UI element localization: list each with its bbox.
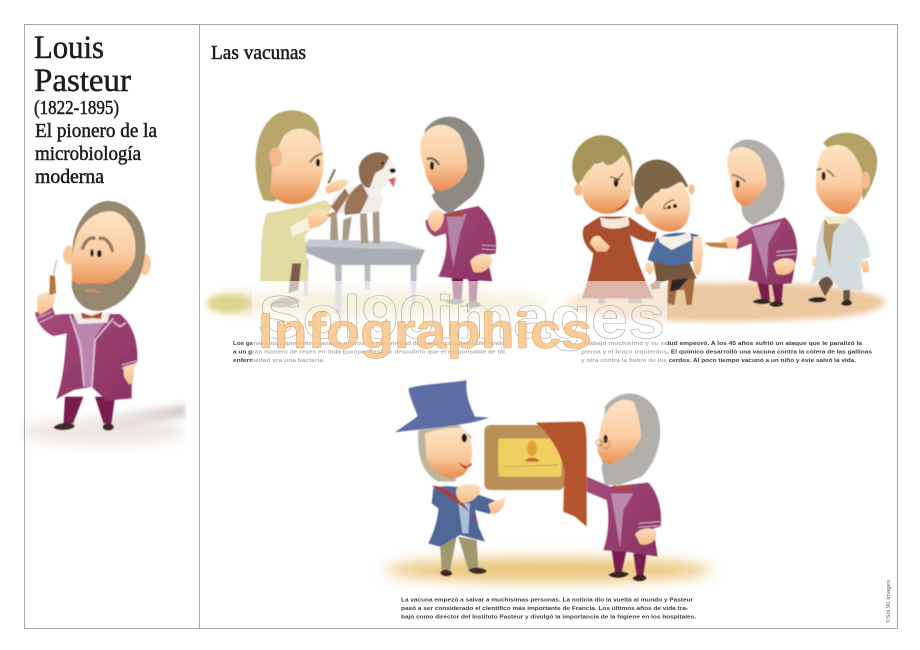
floor shadow xyxy=(20,404,187,445)
text: scene 1 caption xyxy=(233,341,505,364)
legs and shoes xyxy=(53,397,115,431)
table xyxy=(303,239,425,313)
hand with vaccine tool xyxy=(37,260,57,315)
moustache and beard front xyxy=(73,262,135,310)
text: scene 2 caption: Trabajó muchísimo y su salud empeoró. A los 45 años sufrió un ataque que le paralizó la xyxy=(583,341,863,347)
right hand xyxy=(123,363,135,385)
red curtain xyxy=(536,422,587,527)
young assistant xyxy=(808,133,877,306)
watermark panel xyxy=(252,281,667,366)
waistcoat xyxy=(73,318,108,387)
dignitary in top hat xyxy=(395,380,505,576)
heading: Louis Pasteur: Louis xyxy=(34,30,104,66)
coat xyxy=(35,305,137,401)
text: scene 3 caption: bajó como director del Instituto Pasteur y divulgó la importancia de la higiene en los hospitales. xyxy=(401,614,696,620)
heading: Louis Pasteur: El pionero de la xyxy=(35,120,157,142)
heading: Louis Pasteur: Pasteur xyxy=(34,63,131,99)
heading: Louis Pasteur xyxy=(34,30,157,188)
text: scene 2 caption: y otra contra la fiebre de los cerdos. Al poco tiempo vacunó a un niño y éste salvó la vida. xyxy=(581,358,856,364)
young doctor xyxy=(256,110,348,307)
heading: Louis Pasteur: (1822-1895) xyxy=(34,97,119,119)
Pasteur with syringe xyxy=(704,139,797,307)
mother xyxy=(572,135,657,303)
text: scene 3 caption xyxy=(401,598,696,620)
face xyxy=(72,211,135,288)
illustration: scene 2, vaccinating the boy xyxy=(566,133,884,322)
heading: Las vacunas: Las vacunas xyxy=(211,42,306,64)
text: scene 2 caption: pierna y el brazo izquierdos. El químico desarrolló una vacuna contra la cólera de las gallinas xyxy=(581,350,872,356)
watermark text: Sol90images xyxy=(258,284,665,351)
ground xyxy=(207,289,552,317)
text: scene 1 caption: Los ganaderos importantes pasaron apuros: la enfermedad del carbunco estaba afectando xyxy=(233,341,505,347)
ears xyxy=(63,246,151,275)
heading: Louis Pasteur: moderna xyxy=(35,166,104,188)
text: scene 1 caption: a un gran número de reses en toda Europa. Pasteur descubrió que el responsable de tal xyxy=(233,350,505,356)
illustration: scene 3, the award xyxy=(385,380,712,583)
Pasteur with glasses xyxy=(587,393,661,581)
hair and beard xyxy=(72,201,145,311)
framed portrait xyxy=(484,425,564,490)
boy xyxy=(634,159,703,292)
ground xyxy=(566,283,884,322)
ground xyxy=(385,557,712,583)
dog xyxy=(330,152,397,243)
text: scene 1 caption: enfermedad era una bacteria. xyxy=(233,358,325,364)
text: scene 3 caption: pasó a ser considerado el científico más importante de Francia. Los últimos años de vida tra- xyxy=(401,606,688,612)
elder Pasteur xyxy=(420,117,496,308)
eyes and brows xyxy=(83,238,112,257)
heading: Louis Pasteur: microbiología xyxy=(35,143,141,165)
credit: ©Sol 90 Images xyxy=(885,579,892,623)
illustration: scene 1, examining the dog xyxy=(207,110,552,317)
illustration: Pasteur portrait xyxy=(20,201,187,445)
collar and bow tie xyxy=(73,312,110,324)
watermark text: Infographics xyxy=(258,303,592,359)
stool xyxy=(668,277,695,305)
text: scene 2 caption xyxy=(581,341,872,364)
text: scene 3 caption: La vacuna empezó a salvar a muchísimas personas. La noticia dio la vuelta al mundo y Pasteur xyxy=(401,598,694,604)
